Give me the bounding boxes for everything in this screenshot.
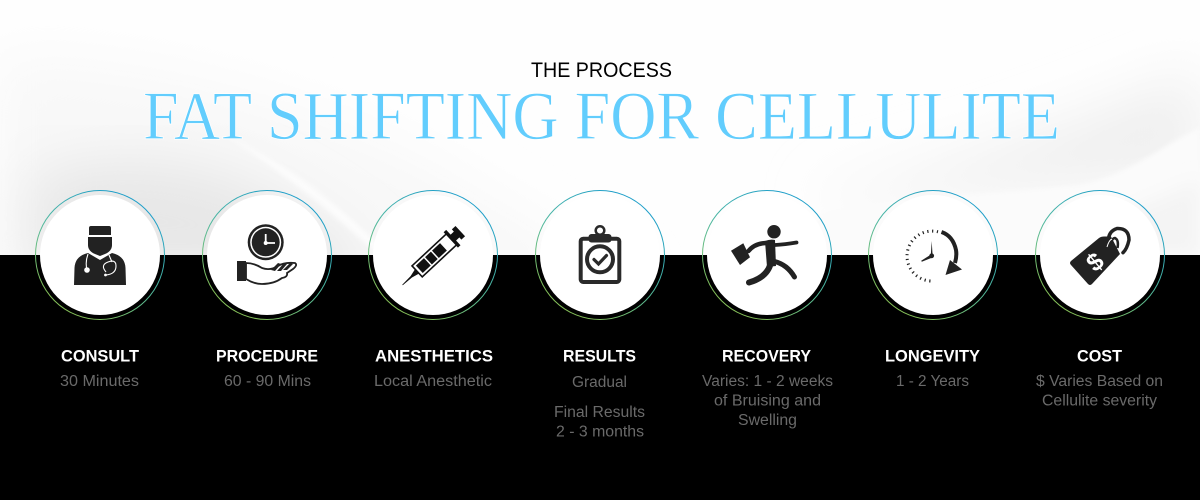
label: recovery: of Bruising and <box>714 392 821 410</box>
label: longevity: LONGEVITY <box>885 346 981 366</box>
black lower section <box>0 255 1200 500</box>
step: procedure <box>202 190 332 390</box>
label: cost: Cellulite severity <box>1042 392 1157 410</box>
label: procedure: 60 - 90 Mins <box>224 373 311 390</box>
label: results <box>554 346 645 440</box>
label: longevity <box>885 346 981 390</box>
label: consult: 30 Minutes <box>60 373 139 390</box>
label: consult <box>60 346 140 390</box>
label: anesthetics <box>374 346 493 390</box>
label: longevity: 1 - 2 Years <box>896 373 969 390</box>
icon: clipboard with check <box>581 226 619 282</box>
label: procedure <box>216 346 318 390</box>
label: recovery <box>702 346 833 429</box>
heading: the process: THE PROCESS <box>531 59 672 82</box>
icon: doctor <box>74 226 126 285</box>
label: results: Gradual <box>572 374 627 391</box>
label: recovery: Varies: 1 - 2 weeks <box>702 373 833 390</box>
title: FAT SHIFTING FOR CELLULITE <box>143 78 1060 154</box>
label: cost <box>1036 346 1163 410</box>
label: recovery: RECOVERY <box>722 346 812 366</box>
step: cost <box>1036 190 1164 410</box>
icon: clock over hand <box>237 224 296 284</box>
icon: syringe <box>395 223 467 293</box>
label: recovery: Swelling <box>738 412 797 429</box>
step: anesthetics <box>368 190 498 390</box>
step: longevity <box>868 190 998 390</box>
label: procedure: PROCEDURE <box>216 346 318 366</box>
step: consult <box>36 190 164 390</box>
label: results: Final Results <box>554 404 645 421</box>
step: recovery <box>702 190 833 429</box>
label: anesthetics: ANESTHETICS <box>375 346 493 366</box>
label: results: RESULTS <box>563 346 636 366</box>
label: consult: CONSULT <box>61 346 140 366</box>
label: anesthetics: Local Anesthetic <box>374 373 492 390</box>
icon: clock with arrow <box>907 231 962 281</box>
label: cost: COST <box>1077 346 1123 366</box>
background: white upper section with grey swooshes <box>0 0 1200 290</box>
icon: running businessman <box>731 225 796 282</box>
label: results: 2 - 3 months <box>556 424 644 440</box>
step: results <box>536 190 664 440</box>
icon: price tag: $ <box>1081 247 1110 278</box>
icon: price tag <box>1070 228 1129 285</box>
label: cost: $ Varies Based on <box>1036 373 1163 390</box>
